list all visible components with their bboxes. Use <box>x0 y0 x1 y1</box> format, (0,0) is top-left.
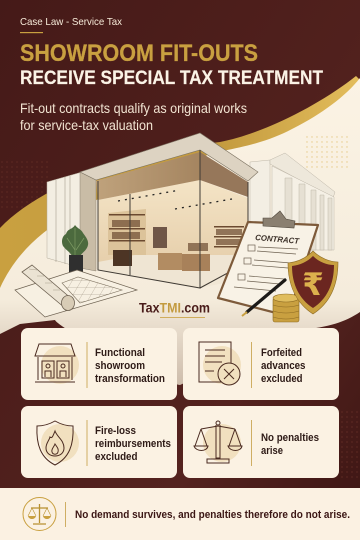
icon: scales <box>194 421 242 463</box>
icon: document with cross <box>199 342 241 385</box>
card: no penalties arise <box>183 406 339 478</box>
brand: TaxTMI.com <box>139 300 210 316</box>
gold rule <box>20 32 43 33</box>
left pillar <box>80 168 96 271</box>
card text: arise <box>261 445 283 457</box>
coins <box>273 294 299 322</box>
courthouse sketch <box>250 153 335 250</box>
icon: shield with flame <box>37 421 79 465</box>
divider <box>86 420 88 466</box>
shield: ₹ <box>302 267 324 303</box>
dark dots <box>0 160 360 480</box>
roof slab <box>80 133 258 181</box>
divider <box>65 502 66 527</box>
rear walls <box>108 209 146 255</box>
subtitle <box>20 101 247 133</box>
card text: reimbursements <box>95 438 171 450</box>
title <box>20 40 323 89</box>
card: forfeited advances excluded <box>183 328 339 400</box>
floor <box>96 262 262 288</box>
card text: excluded <box>95 451 138 463</box>
gold swoosh <box>0 76 360 290</box>
card text <box>261 347 306 385</box>
title: SHOWROOM FIT-OUTS <box>20 40 258 67</box>
card text: Forfeited <box>261 347 302 359</box>
track lights <box>118 190 232 209</box>
frames <box>98 150 248 288</box>
card: functional showroom transformation <box>21 328 177 400</box>
card text: No penalties <box>261 432 319 444</box>
clipboard <box>218 211 318 316</box>
card text: advances <box>261 360 306 372</box>
title: RECEIVE SPECIAL TAX TREATMENT <box>20 67 323 89</box>
icon: gold scales badge <box>23 498 56 530</box>
card text <box>95 425 171 463</box>
left sketched wing <box>47 172 82 268</box>
shelves and bags <box>109 214 244 271</box>
footer band <box>0 488 360 540</box>
plant <box>62 225 88 273</box>
card text: showroom <box>95 360 145 372</box>
subtitle: for service-tax valuation <box>20 118 153 133</box>
checklist <box>234 245 298 291</box>
clip <box>263 211 295 228</box>
dots on cream <box>305 134 350 170</box>
storefront interior <box>98 180 248 287</box>
pen <box>242 280 285 316</box>
floor inside <box>98 255 248 287</box>
card text: Functional <box>95 347 145 359</box>
icon: storefront <box>35 344 79 384</box>
card text: Fire-loss <box>95 425 136 437</box>
divider <box>86 342 88 388</box>
card text <box>261 432 319 457</box>
blueprint roll <box>15 265 137 317</box>
fascia right <box>200 152 248 197</box>
divider <box>251 420 252 466</box>
card text: transformation <box>95 373 165 385</box>
card text: excluded <box>261 373 302 385</box>
eyebrow label: Case Law - Service Tax <box>20 17 123 28</box>
divider <box>251 342 252 388</box>
fascia left <box>96 152 200 200</box>
card text <box>95 347 165 385</box>
wing sketch lines <box>56 176 70 265</box>
shield <box>288 251 338 314</box>
card: fire-loss reimbursements excluded <box>21 406 177 478</box>
subtitle: Fit-out contracts qualify as original works <box>20 101 247 116</box>
contract heading: CONTRACT <box>255 233 301 246</box>
cream hero area <box>0 78 360 385</box>
showroom <box>47 133 262 288</box>
